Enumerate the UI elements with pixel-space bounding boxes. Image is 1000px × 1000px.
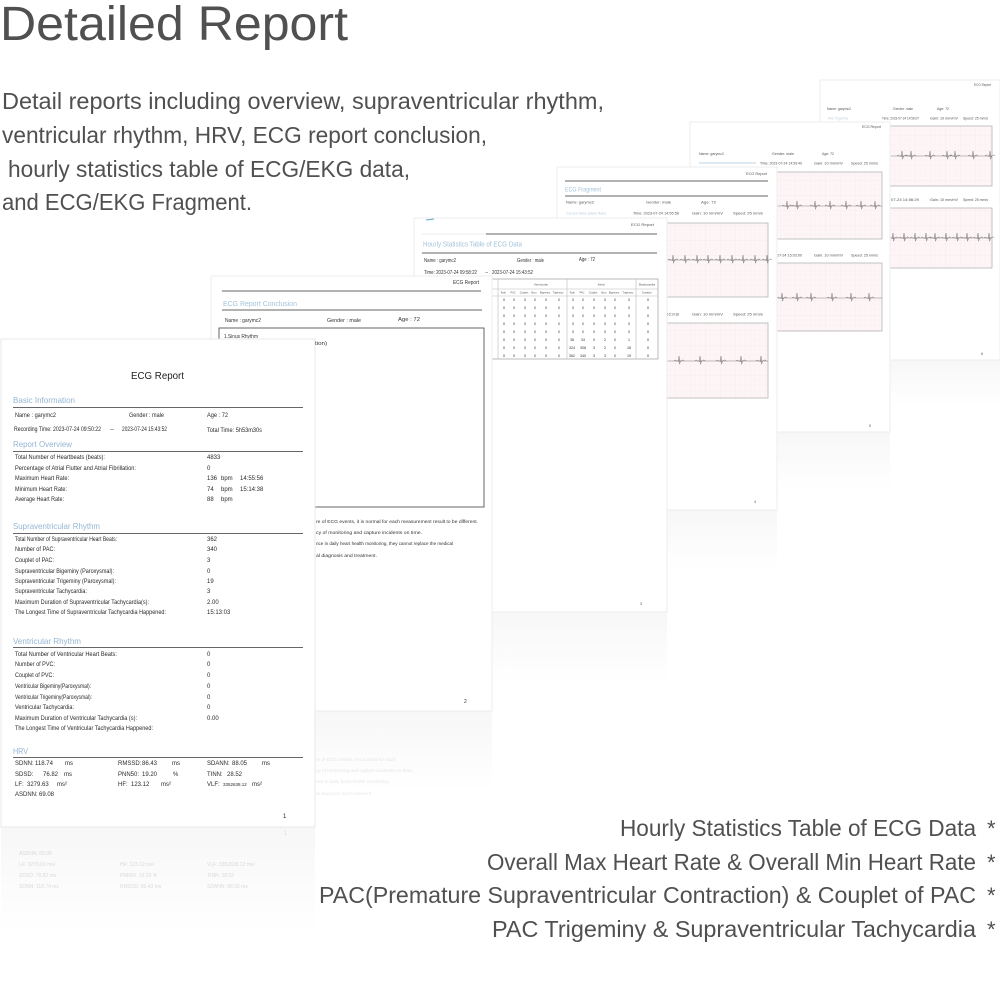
report page 2: conclusion (211, 276, 492, 711)
disclaimer text: cy of monitoring and capture incidents on time. (316, 530, 422, 535)
section: ventricular rhythm: Maximum Duration of Ventricular Tachycardia (s): (15, 716, 137, 722)
hourly statistics table: 000000 (503, 346, 560, 350)
hourly statistics table: 0 (593, 338, 595, 342)
intro text block: and ECG/EKG Fragment. (2, 189, 252, 215)
report page reflections (1, 360, 1000, 932)
section: report overview: bpm (221, 487, 233, 493)
hourly statistics table: 34 (581, 338, 585, 342)
report page 6: Time: 2023-07-24 14:58:07 (882, 116, 919, 120)
section: HRV: HF: (118, 782, 128, 788)
hourly statistics table: 38 (570, 338, 574, 342)
feature list: * (987, 883, 996, 908)
report page reflections: TINN: 28.52 (207, 873, 234, 879)
section: report overview: bpm (221, 476, 233, 482)
hourly statistics table: 1 (628, 338, 630, 342)
hourly statistics table: 18 (627, 346, 631, 350)
report page 3: hourly statistics: 3 (640, 602, 642, 606)
report page 5: 07-24 15:03:00 (777, 254, 802, 258)
report page 5: Time: 2023-07-24 14:59:40 (760, 162, 802, 166)
intro text block: ventricular rhythm, HRV, ECG report conclusion, (2, 122, 487, 148)
report page reflections: LF: 3279.63 ms² (19, 862, 56, 868)
report page 2: conclusion: 1.Sinus Rhythm (224, 334, 258, 340)
report page 4: Name: garymc2 (566, 200, 594, 204)
report page 5: 5 (869, 424, 871, 428)
report page 5: Name: garymc2 (699, 152, 724, 156)
report page reflections: VLF: 3352638.12 ms² (207, 862, 255, 868)
report page reflections: nce in daily heart health monitoring (316, 779, 389, 784)
page heading: ECG Report (131, 370, 184, 382)
section: HRV: TINN: (207, 772, 223, 778)
feature list: * (987, 816, 996, 841)
section: basic information: Age : 72 (207, 413, 229, 419)
report page 4: Gain: 10 mm/mV (692, 212, 724, 216)
hourly statistics table: Total (569, 292, 575, 294)
section: HRV: ms (262, 761, 270, 767)
report page 4: 4 (754, 500, 756, 504)
report page 4 (557, 167, 777, 510)
report page 2: conclusion: Name : garymc2 (225, 318, 261, 324)
report page 6: Name: garymc2 (827, 107, 851, 111)
section: basic information: Recording Time: 2023-07-24 09:50:22 (14, 427, 102, 433)
report page 5: Gain: 10 mm/mV (814, 162, 844, 166)
report page 6: Speed: 25 mm/s (963, 116, 988, 120)
section: supraventricular rhythm (13, 521, 303, 616)
section: basic information: Total Time: 5h53m30s (207, 428, 262, 434)
hourly statistics table: Trigeminy (553, 292, 564, 294)
section: supraventricular rhythm: 362 (207, 537, 218, 543)
section: report overview: 14:55:56 (240, 476, 264, 482)
section: supraventricular rhythm: Supraventricular Tachycardia: (15, 589, 87, 595)
report page 6: Gender: male (893, 107, 913, 111)
section: ventricular rhythm: 0 (207, 695, 211, 701)
hourly statistics table: 0000000000000 (503, 298, 649, 302)
section: HRV: 28.52 (227, 772, 243, 778)
report page 5: Gender: male (772, 152, 794, 156)
hourly statistics table: 0 (614, 338, 616, 342)
section: HRV: % (173, 772, 179, 778)
section: report overview: 88 (207, 497, 214, 503)
hourly statistics table: Ventricular (534, 282, 548, 286)
ECG chart (830, 208, 994, 268)
section: supraventricular rhythm: 3 (207, 558, 211, 564)
section: report overview: 0 (207, 466, 211, 472)
report page 3: hourly statistics: Gender : male (517, 258, 544, 264)
section: supraventricular rhythm: The Longest Time of Supraventricular Tachycardia Happened: (15, 610, 166, 616)
section: HRV: ms² (57, 782, 67, 788)
hourly statistics table: Duration (642, 292, 652, 294)
disclaimer text: re of ECG events, it is normal for each measurement result to be different. (316, 519, 478, 524)
hourly statistics table: 340 (580, 354, 586, 358)
section: supraventricular rhythm: Number of PAC: (15, 547, 55, 553)
disclaimer text: al diagnosis and treatment. (316, 553, 377, 558)
hourly statistics table: Total (500, 292, 506, 294)
section: supraventricular rhythm: 340 (207, 547, 218, 553)
hourly statistics table: PVC (510, 292, 516, 294)
section: HRV: 3352638.12 (223, 782, 247, 787)
section: HRV: ms² (252, 782, 262, 788)
section: ventricular rhythm: 0 (207, 705, 211, 711)
section: HRV: SDANN: (207, 761, 230, 767)
section: report overview: 15:14:38 (240, 487, 264, 493)
report page 6: Gain: 10 mm/mV (930, 116, 959, 120)
hourly statistics table: Couplet (589, 292, 598, 294)
feature list: * (987, 917, 996, 942)
section: HRV: ms (172, 761, 180, 767)
section: basic information: -- (110, 427, 114, 433)
section: HRV: 118.74 (35, 761, 54, 767)
disclaimer text (316, 519, 478, 558)
section: supraventricular rhythm: 2.00 (207, 600, 219, 606)
hourly statistics table: Bcru (601, 292, 607, 294)
report page reflections: cy of monitoring and capture incidents on time. (316, 768, 413, 773)
section: supraventricular rhythm: Total Number of Supraventricular Heart Beats: (15, 537, 117, 543)
report page 5: Speed: 25 mm/s (851, 162, 878, 166)
section: ventricular rhythm: 0 (207, 652, 211, 658)
section: ventricular rhythm: The Longest Time of Ventricular Tachycardia Happened: (15, 726, 153, 732)
section: HRV: 76.82 (43, 772, 59, 778)
report page 3: hourly statistics: Age : 72 (579, 257, 595, 263)
section: HRV: 88.05 (232, 761, 248, 767)
hourly statistics table: 0000000000000 (503, 330, 649, 334)
report page 3: hourly statistics: Hourly Statistics Table of ECG Data (423, 242, 522, 248)
report page 4: Time: 2023-07-24 14:55:56 (633, 212, 679, 216)
section: supraventricular rhythm: 0 (207, 569, 211, 575)
report page 1: overview: 1 (283, 814, 287, 820)
feature list: PAC(Premature Supraventricular Contraction) & Couplet of PAC (319, 882, 976, 908)
section: report overview (13, 439, 303, 503)
section: HRV: RMSSD: (118, 761, 142, 767)
section: HRV: LF: (15, 782, 24, 788)
report page 5: Speed: 25 mm/s (851, 254, 878, 258)
section: ventricular rhythm: Ventricular Tachycardia: (15, 705, 74, 711)
report page reflections: ASDNN: 69.08 (19, 851, 52, 857)
hourly statistics table: 3 (593, 346, 595, 350)
report page 4: Speed: 25 mm/s (733, 312, 763, 316)
report page 2: conclusion: ECG Report (453, 280, 480, 286)
section: report overview: Percentage of Atrial Flutter and Atrial Fibrillation: (15, 466, 136, 472)
report page 4: ECG Report (746, 172, 767, 176)
report page 2: conclusion: Age : 72 (398, 317, 420, 323)
section: report overview: 4833 (207, 455, 221, 461)
section: HRV (13, 746, 303, 798)
report page 2: conclusion: tion) (315, 341, 327, 347)
hourly statistics table: PAC (580, 292, 585, 294)
section: report overview: 136 (207, 476, 218, 482)
section: ventricular rhythm: 0 (207, 684, 211, 690)
hourly statistics table: Bigeminy (540, 292, 551, 294)
report page 2: conclusion: 2 (464, 699, 467, 705)
section: HRV: HRV (13, 746, 28, 756)
hourly statistics table: 0 (647, 354, 649, 358)
feature list (319, 815, 996, 942)
report page 5: Age: 72 (822, 152, 834, 156)
section: supraventricular rhythm: 3 (207, 589, 211, 595)
report page 4: Age: 72 (701, 200, 716, 204)
report page 5: ECG Report (862, 125, 881, 129)
section: HRV: SDSD: (15, 772, 34, 778)
report page 6 (820, 80, 1000, 360)
hourly statistics table: Bigeminy (609, 292, 620, 294)
report page 6: ECG Report (974, 83, 991, 87)
hourly statistics table: 324 (569, 346, 575, 350)
feature list: PAC Trigeminy & Supraventricular Tachycardia (492, 916, 976, 942)
report page 6: PAC Trigeminy (828, 116, 848, 120)
section: HRV: SDNN: (15, 761, 34, 767)
intro text block (2, 88, 604, 215)
report page 3: hourly statistics: -- (485, 270, 489, 276)
section: basic information (13, 395, 303, 434)
section: supraventricular rhythm: Supraventricular Trigeminy (Paroxysmal): (15, 579, 116, 585)
report page 4: ECG Fragment (565, 188, 601, 194)
hourly statistics table: 0 (647, 346, 649, 350)
hourly statistics table: 0000000000000 (503, 314, 649, 318)
hourly statistics table: 0 (614, 346, 616, 350)
hourly statistics table: 3 (604, 354, 606, 358)
report page 4: Current Value (blank Rate) (566, 212, 606, 216)
report page 1: overview (1, 339, 315, 827)
report page reflections: SDANN: 88.05 ms (207, 884, 248, 890)
section: HRV: VLF: (207, 782, 220, 788)
report page reflections: SDNN: 118.74 ms (19, 884, 59, 890)
report page reflections: PNN50: 19.20 % (120, 873, 158, 879)
report page 6: 6 (981, 352, 983, 356)
intro text block: hourly statistics table of ECG/EKG data, (8, 156, 410, 182)
report page 2: conclusion: Gender : male (327, 318, 361, 324)
hourly statistics table: 000000 (503, 354, 560, 358)
section: ventricular rhythm: Ventricular Bigeminy(Paroxysmal): (15, 684, 91, 690)
section: HRV: ms² (161, 782, 171, 788)
section: report overview: 74 (207, 487, 214, 493)
section: HRV: 86.43 (142, 761, 158, 767)
intro text block: Detail reports including overview, supraventricular rhythm, (2, 88, 604, 114)
report page reflections: al diagnosis and treatment. (316, 791, 372, 796)
report page 4: Speed: 25 mm/s (733, 212, 763, 216)
section: HRV: 69.08 (39, 792, 55, 798)
section: HRV: 123.12 (131, 782, 150, 788)
section: report overview: Maximum Heart Rate: (15, 476, 69, 482)
hourly statistics table: 19 (627, 354, 631, 358)
hourly statistics table: 0 (614, 354, 616, 358)
report page 3: hourly statistics (414, 218, 667, 612)
hourly statistics table (480, 279, 658, 359)
hourly statistics table: Bcru (531, 292, 537, 294)
hourly statistics table: 2 (604, 338, 606, 342)
section: HRV: ms (65, 761, 73, 767)
disclaimer text: nce in daily heart health monitoring, they cannot replace the medical (316, 541, 453, 546)
hourly statistics table: 0000000000000 (503, 306, 649, 310)
report page 6: Age: 72 (937, 107, 949, 111)
ECG chart (565, 223, 772, 297)
section: ventricular rhythm (13, 636, 303, 732)
section: basic information: 2023-07-24 15:43:52 (122, 427, 168, 433)
report page 4: 15:14:38 (667, 312, 679, 316)
section: supraventricular rhythm: 15:13:03 (207, 610, 231, 616)
section: basic information: Gender : male (129, 413, 165, 419)
ECG chart (699, 172, 882, 239)
report page 5: Gain: 10 mm/mV (814, 254, 844, 258)
section: ventricular rhythm: Ventricular Rhythm (13, 636, 81, 646)
section: ventricular rhythm: Ventricular Trigeminy(Paroxysmal): (15, 695, 92, 701)
section: ventricular rhythm: 0 (207, 662, 211, 668)
hourly statistics table: 308 (580, 346, 586, 350)
hourly statistics table: Atrial (598, 282, 605, 286)
report page 6: 07-24 14:56:29 (891, 198, 919, 202)
report page 3: hourly statistics: Time: 2023-07-24 09:58:22 (424, 270, 477, 276)
hourly statistics table: 0000000000000 (503, 322, 649, 326)
report page 6: Gain: 10 mm/mV (930, 198, 959, 202)
section: supraventricular rhythm: Maximum Duration of Supraventricular Tachycardia(s): (15, 600, 149, 606)
feature list: * (987, 850, 996, 875)
hourly statistics table: Bradycardia (639, 282, 655, 286)
report page 3: hourly statistics: 2023-07-24 15:43:52 (492, 270, 533, 276)
ECG chart (699, 263, 882, 331)
section: report overview: Minimum Heart Rate: (15, 487, 67, 493)
report page reflections: RMSSD: 86.43 ms (120, 884, 162, 890)
hourly statistics table: Couplet (520, 292, 529, 294)
section: report overview: Report Overview (13, 439, 73, 449)
report page reflections: HF: 123.12 ms² (120, 862, 155, 868)
report page 4: Gender: male (646, 200, 671, 204)
hourly statistics table: Trigeminy (623, 292, 634, 294)
section: HRV: PNN50: (118, 772, 139, 778)
section: HRV: 3279.63 (27, 782, 49, 788)
hourly statistics table: 2 (604, 346, 606, 350)
hourly statistics table: 362 (569, 354, 575, 358)
section: HRV: ms (64, 772, 72, 778)
section: supraventricular rhythm: 19 (207, 579, 214, 585)
section: ventricular rhythm: Number of PVC: (15, 662, 55, 668)
section: ventricular rhythm: Total Number of Ventricular Heart Beats: (15, 652, 117, 658)
section: supraventricular rhythm: Supraventricular Rhythm (13, 521, 100, 531)
section: report overview: Average Heart Rate: (15, 497, 64, 503)
report page reflections: re of ECG events, it is normal for each (316, 757, 396, 762)
report page 4: Gain: 10 mm/mV (692, 312, 724, 316)
report page 2: conclusion: ECG Report Conclusion (223, 301, 297, 308)
ECG chart (565, 323, 768, 398)
feature list: Hourly Statistics Table of ECG Data (620, 815, 976, 841)
feature list: Overall Max Heart Rate & Overall Min Heart Rate (487, 849, 976, 875)
section: ventricular rhythm: Couplet of PVC: (15, 673, 54, 679)
section: report overview: Total Number of Heartbeats (beats): (15, 455, 105, 461)
hourly statistics table: 000000 (503, 338, 560, 342)
report page 6: Speed: 25 mm/s (963, 198, 988, 202)
section: basic information: Name : garymc2 (15, 413, 57, 419)
section: basic information: Basic Information (13, 395, 75, 405)
section: ventricular rhythm: 0.00 (207, 716, 219, 722)
section: HRV: ASDNN: (15, 792, 38, 798)
section: supraventricular rhythm: Couplet of PAC: (15, 558, 54, 564)
section: ventricular rhythm: 0 (207, 673, 211, 679)
report page 5 (690, 122, 890, 432)
section: supraventricular rhythm: Supraventricular Bigeminy (Paroxysmal): (15, 569, 114, 575)
ECG chart (830, 126, 995, 186)
report page reflections: SDSD: 76.82 ms (19, 873, 57, 879)
hourly statistics table: 3 (593, 354, 595, 358)
report page 3: hourly statistics: Name : garymc2 (424, 258, 456, 264)
conclusion box (219, 328, 484, 507)
section: report overview: bpm (221, 497, 233, 503)
hourly statistics table: 0 (647, 338, 649, 342)
section: HRV: 19.20 (142, 772, 158, 778)
report page 3: hourly statistics: ECG Report (631, 223, 654, 227)
report page reflections: 1 (284, 831, 287, 837)
